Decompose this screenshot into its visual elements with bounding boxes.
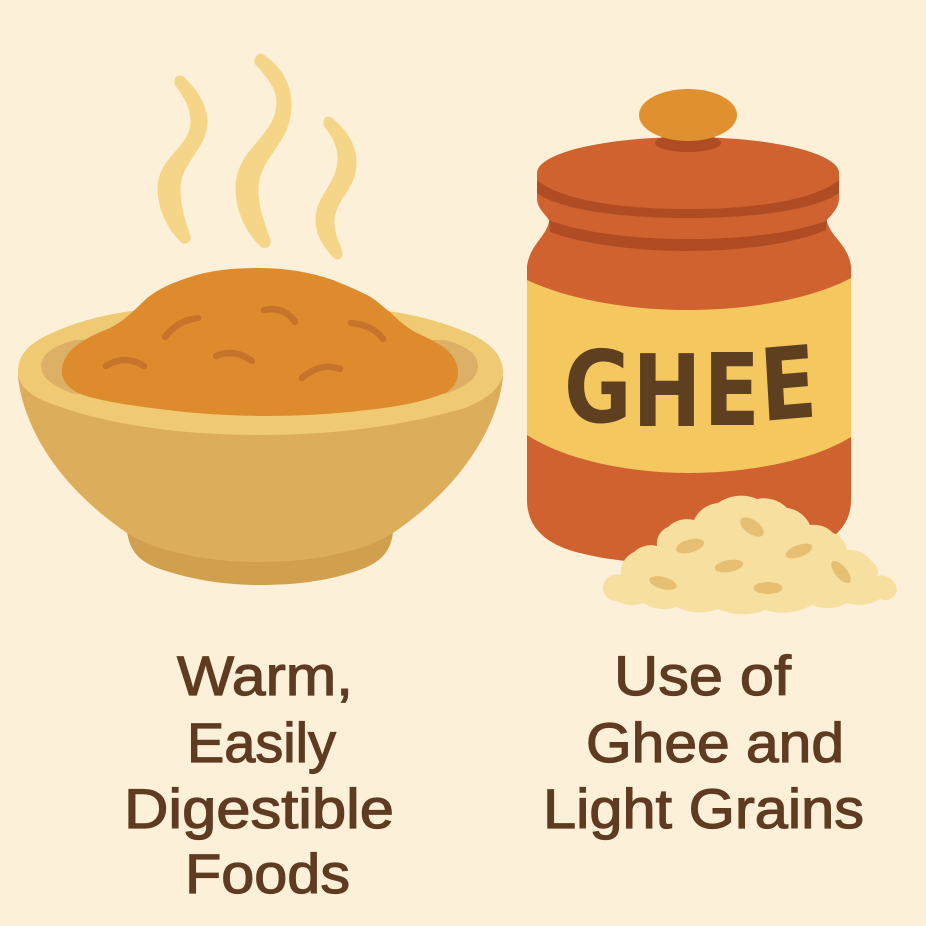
caption: warm, easily digestible foods: Foods [185, 842, 350, 905]
caption: use of ghee and light grains: Use of [614, 644, 791, 707]
caption: use of ghee and light grains: Ghee and [586, 711, 844, 774]
caption: warm, easily digestible foods: Easily [187, 711, 336, 774]
caption: warm, easily digestible foods [124, 644, 394, 905]
food flecks [106, 309, 383, 378]
lid groove [537, 180, 839, 218]
caption: warm, easily digestible foods: Digestible [124, 777, 394, 840]
jar label [527, 278, 851, 473]
lid knob [639, 89, 737, 141]
caption: use of ghee and light grains: Light Grains [543, 777, 864, 840]
icon: bowl of warm food [18, 268, 503, 585]
food mound [62, 268, 458, 416]
grain pile [603, 496, 897, 614]
lid side [537, 172, 839, 239]
icon: steam wisps [159, 55, 355, 258]
bowl body [18, 376, 503, 562]
caption: use of ghee and light grains [543, 644, 864, 840]
icon: ghee jar [527, 89, 851, 564]
icon: pile of light grains [603, 496, 897, 614]
grain seeds [648, 514, 854, 594]
lid top [537, 137, 839, 209]
knob shadow [655, 134, 721, 152]
label text: GHEE [564, 324, 820, 450]
bowl rim [18, 310, 503, 435]
neck shadow [549, 220, 827, 251]
bowl inner wall [41, 340, 478, 394]
bowl foot [127, 532, 393, 585]
jar body [527, 222, 851, 564]
caption: warm, easily digestible foods: Warm, [177, 644, 353, 707]
